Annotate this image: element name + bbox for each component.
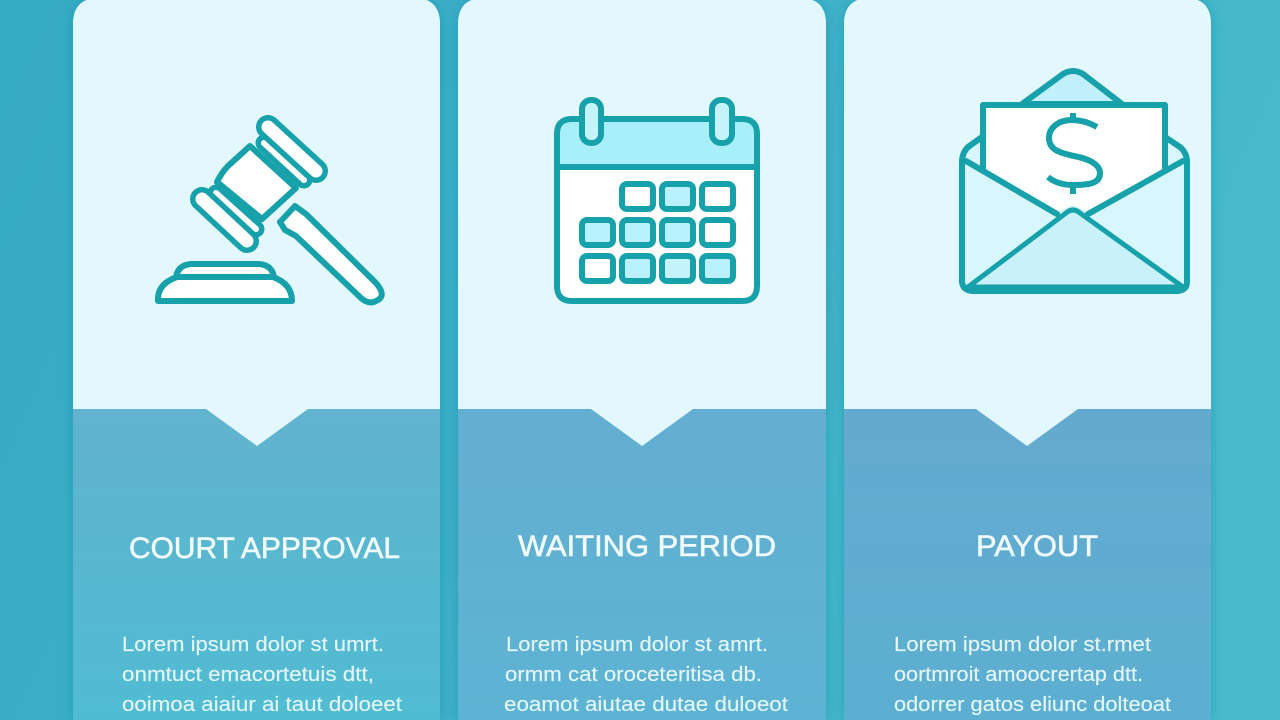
lower band: court approval — [73, 409, 440, 720]
heading: court approval: COURT APPROVAL — [129, 532, 400, 565]
icon: dollar sign — [1048, 113, 1100, 194]
panel: court approval — [73, 0, 440, 720]
text block: waiting period: ormm cat oroceteritisa db. — [505, 664, 762, 686]
text block: payout: oortmroit amoocrertap dtt. — [894, 664, 1143, 686]
text block: waiting period — [504, 634, 788, 716]
icon: calendar — [557, 100, 757, 301]
text block: payout — [894, 634, 1171, 716]
text block: court approval: onmtuct emacortetuis dtt, — [122, 664, 374, 686]
icon: gavel — [158, 127, 382, 302]
panel: payout — [844, 0, 1211, 720]
text block: payout: odorrer gatos eliunc dolteoat — [894, 694, 1171, 716]
text block: court approval: ooimoa aiaiur ai taut doloeet — [122, 694, 402, 716]
text block: payout: Lorem ipsum dolor st.rmet — [894, 634, 1151, 656]
heading: waiting period: WAITING PERIOD — [518, 530, 776, 563]
heading: payout: PAYOUT — [976, 530, 1098, 563]
text block: waiting period: Lorem ipsum dolor st amrt. — [506, 634, 768, 656]
text block: court approval — [122, 634, 402, 716]
icon: envelope with dollar bill — [962, 71, 1187, 291]
panel: waiting period — [458, 0, 826, 720]
lower band: waiting period — [458, 409, 826, 720]
lower band: payout — [844, 409, 1211, 720]
text block: court approval: Lorem ipsum dolor st umrt. — [122, 634, 384, 656]
text block: waiting period: eoamot aiutae dutae duloeot — [504, 694, 788, 716]
